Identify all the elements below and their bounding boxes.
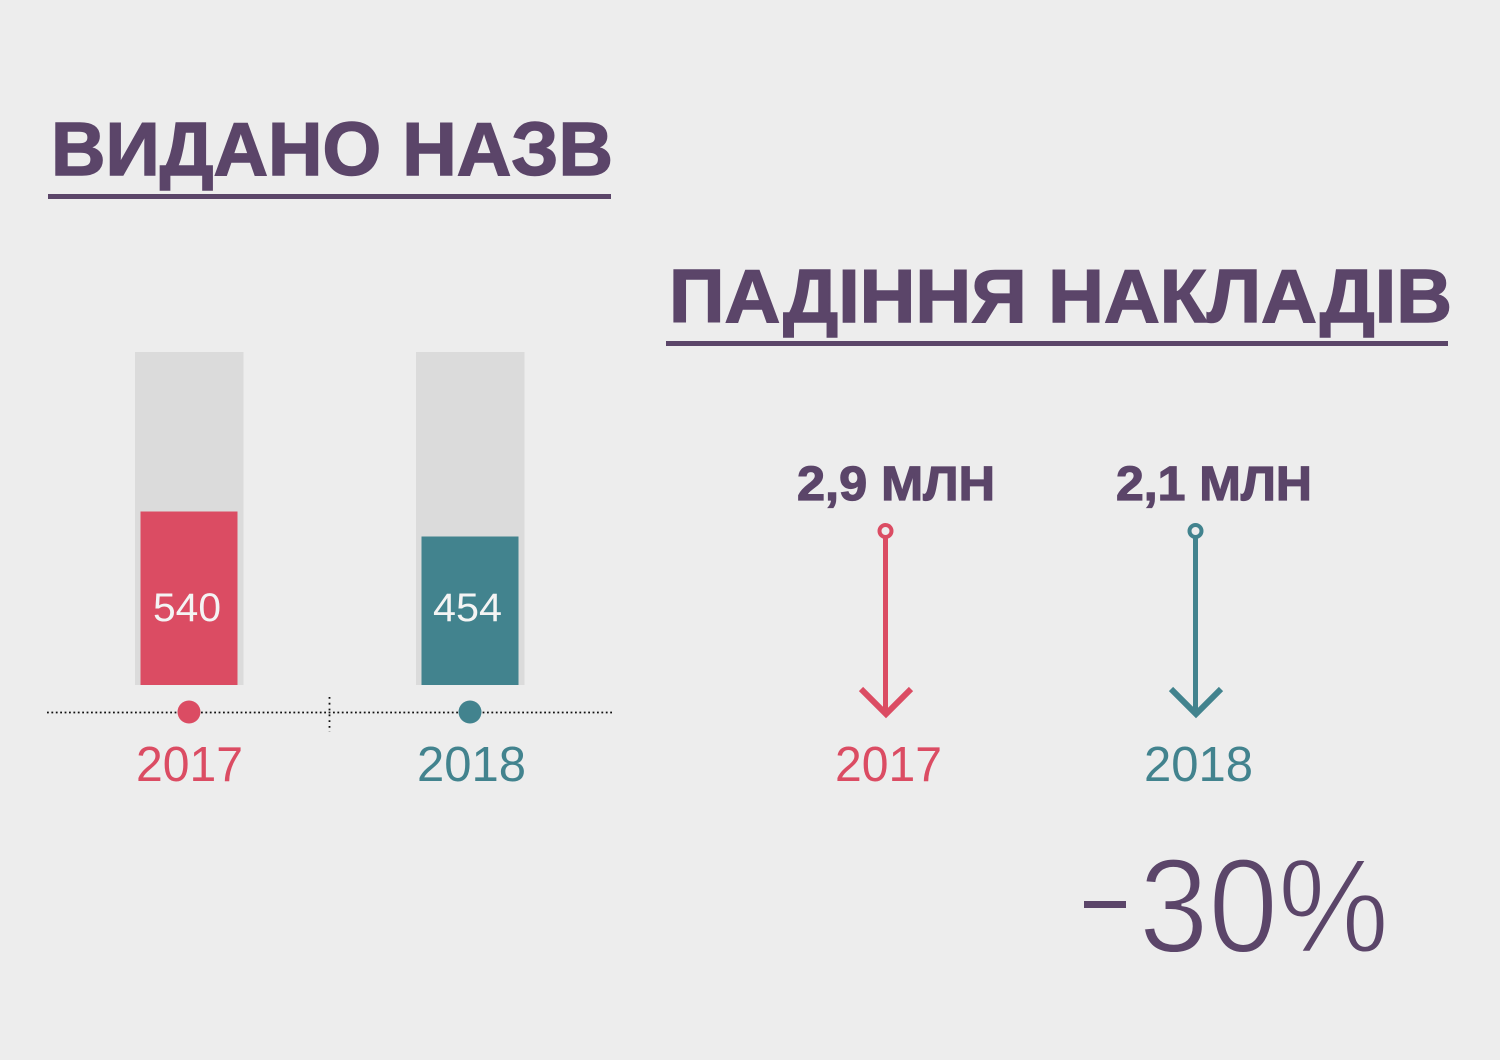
bar 2018: 454 (433, 586, 502, 630)
year label 2018: 2018 (417, 738, 526, 792)
arrow 2018 (1171, 525, 1221, 714)
timeline marker 2018 (458, 700, 482, 724)
panel: titles published (47, 107, 613, 792)
bar 2018 (416, 352, 524, 685)
bar chart (47, 352, 612, 792)
year label 2017: 2017 (136, 738, 243, 792)
bar 2017 (135, 352, 244, 685)
year label 2018: 2018 (1144, 738, 1253, 792)
heading: titles published: ВИДАНО НАЗВ (51, 107, 613, 191)
bar 2017: 540 (153, 586, 221, 630)
arrow 2017 (861, 525, 911, 714)
value 2017: 2,9 МЛН (797, 458, 995, 511)
value 2018: 2,1 МЛН (1116, 458, 1312, 511)
panel: print run decline (666, 254, 1452, 981)
heading: print run decline: ПАДІННЯ НАКЛАДІВ (669, 254, 1452, 338)
year label 2017: 2017 (835, 738, 942, 792)
percentage drop: 30% (1139, 832, 1389, 981)
timeline marker 2017 (178, 700, 200, 724)
